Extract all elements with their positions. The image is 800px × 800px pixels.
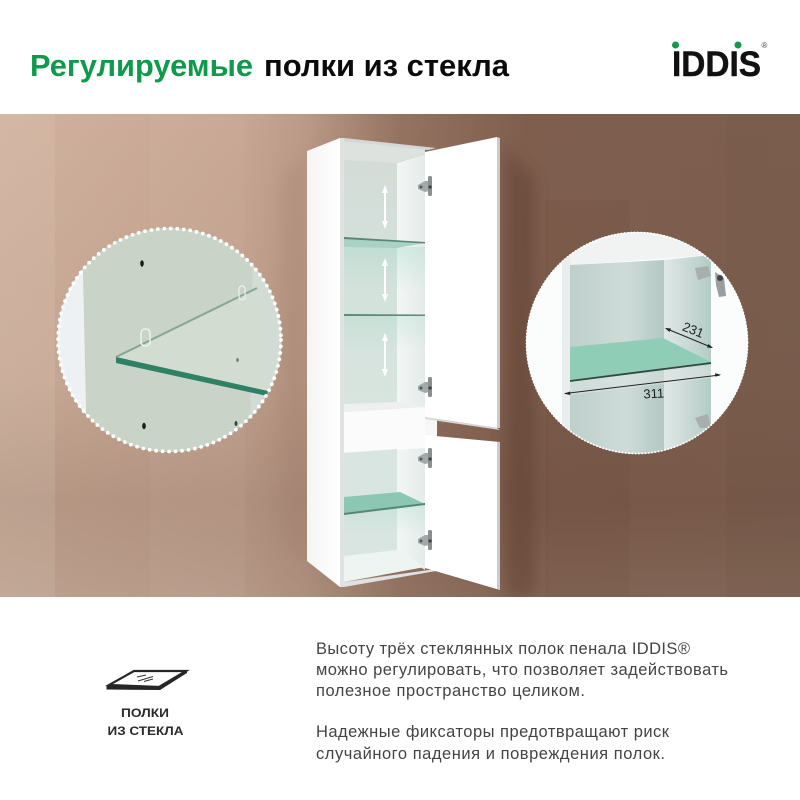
title: полки из стекла <box>264 48 510 83</box>
shelf 2 <box>344 314 425 316</box>
interior right wall <box>397 154 425 570</box>
front edge <box>340 138 344 587</box>
width dimension: 311 <box>564 373 721 402</box>
description text: случайного падения и повреждения полок. <box>316 745 665 763</box>
title: Регулируемые <box>30 48 253 83</box>
lower shelf <box>344 492 425 514</box>
lower back wall <box>344 449 397 556</box>
title <box>30 48 510 83</box>
left detail circle <box>57 228 283 453</box>
description text <box>316 640 728 763</box>
description text: можно регулировать, что позволяет задействовать <box>316 661 728 679</box>
cabinet floor <box>344 550 425 582</box>
description text: Высоту трёх стеклянных полок пенала IDDIS® <box>316 640 690 658</box>
upper door <box>425 137 497 428</box>
side panel <box>307 138 340 587</box>
lower door <box>425 435 500 590</box>
header background <box>0 0 800 114</box>
description text: полезное пространство целиком. <box>316 682 585 700</box>
depth dimension: 231 <box>665 319 713 348</box>
icon label: ИЗ СТЕКЛА <box>108 724 184 738</box>
right detail circle with dimensions <box>526 232 748 454</box>
lower shelf glow <box>344 505 425 535</box>
logo: IDDIS: IDDIS <box>672 45 761 84</box>
drawer connector <box>425 416 437 438</box>
interior top <box>344 141 425 163</box>
shelf 1 <box>344 238 425 248</box>
icon label: ПОЛКИ <box>121 706 169 720</box>
bottom hinge plate <box>695 414 711 428</box>
width dimension: 311: 311 <box>643 385 665 402</box>
upper shelf glow <box>344 247 425 292</box>
photo panel: bathroom wall <box>0 114 800 597</box>
depth dimension: 231: 231 <box>680 319 706 341</box>
drawer block <box>344 407 425 453</box>
pillar cabinet <box>307 137 500 590</box>
door hinges <box>418 176 432 196</box>
middle shelf glow <box>344 316 425 350</box>
icon label <box>108 706 184 738</box>
adjustment arrows <box>382 185 388 377</box>
top hinge plates <box>695 266 711 280</box>
icon: glass shelf <box>107 670 187 690</box>
logo: IDDIS: ® <box>762 41 768 50</box>
interior back wall <box>344 160 397 556</box>
description text: Надежные фиксаторы предотвращают риск <box>316 723 670 741</box>
